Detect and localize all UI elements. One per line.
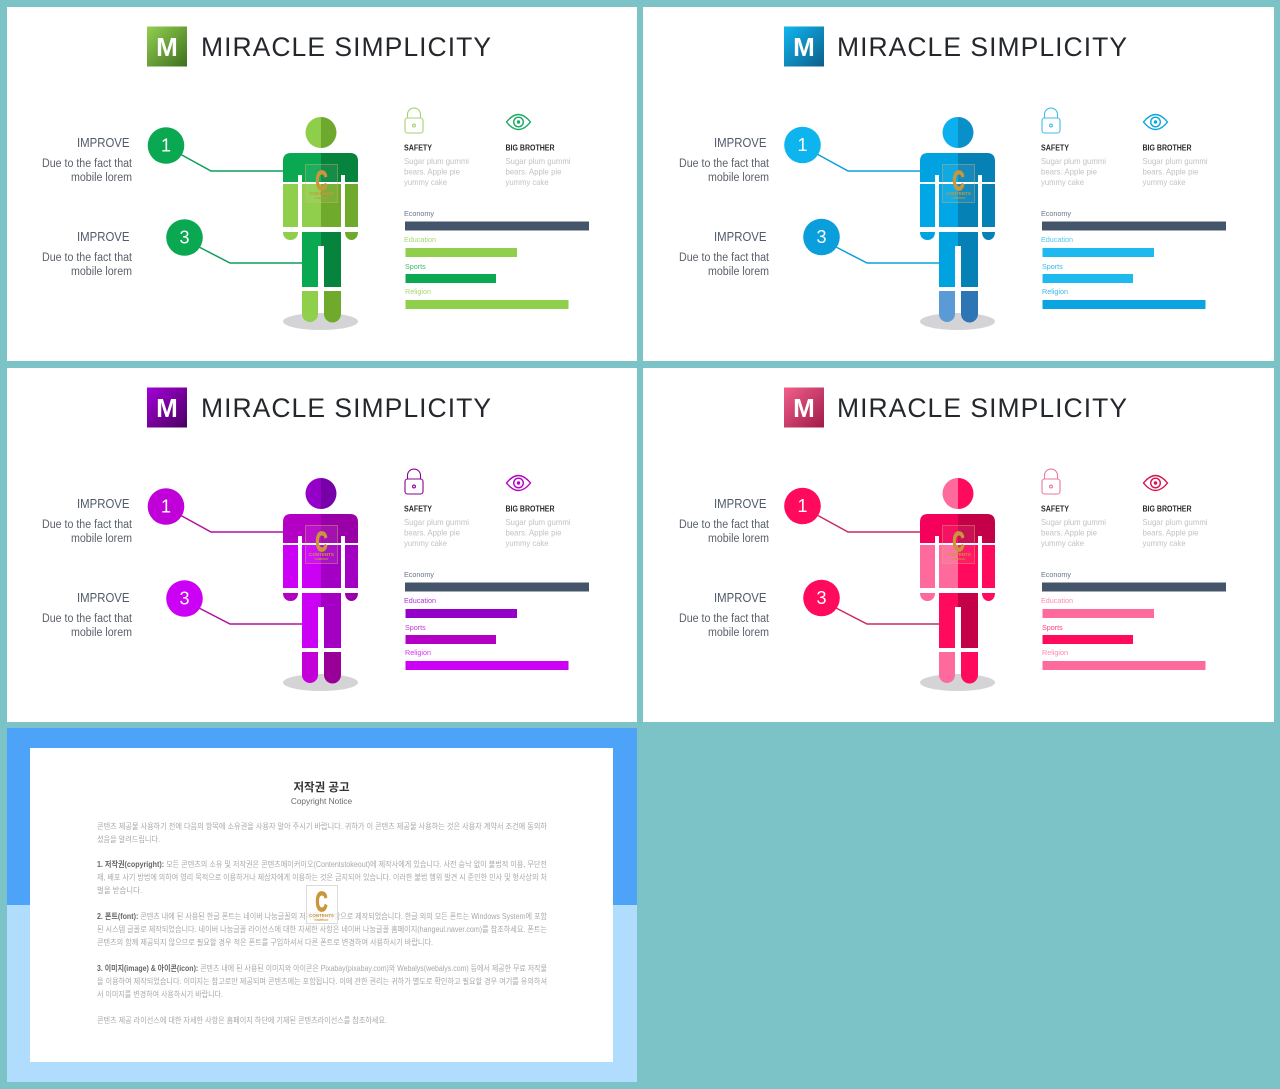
watermark logo: CONTENTS bbox=[309, 191, 334, 196]
text block: big brother: yummy cake bbox=[1142, 539, 1186, 548]
watermark logo: COMPANY bbox=[314, 557, 329, 561]
bar chart: Education bbox=[1041, 596, 1073, 605]
icon: lock bbox=[1042, 469, 1060, 494]
bar chart bbox=[404, 570, 589, 670]
text block: safety: SAFETY bbox=[1041, 504, 1070, 514]
connector line 3 bbox=[199, 247, 302, 263]
text block: safety: SAFETY bbox=[404, 504, 433, 514]
text block: safety: bears. Apple pie bbox=[404, 168, 460, 176]
text block: section 2 font: 2. 폰트(font): 콘텐츠 내에 된 사용된 한글 폰트는 네이버 나눔글꼴의 저작물을 바탕으로 제작되었습니다. 한글 외의 모든 폰트는 Windows System에 포함 bbox=[97, 911, 548, 921]
text block: improve 3: mobile lorem bbox=[71, 627, 132, 639]
text block: safety bbox=[1041, 144, 1106, 187]
panel: pink slide bbox=[643, 368, 1274, 722]
text block: section 1 copyright: 벌을 받습니다. bbox=[97, 885, 142, 895]
connector line 3 bbox=[836, 608, 939, 624]
watermark logo: COMPANY bbox=[314, 196, 329, 200]
text block: improve 3: IMPROVE bbox=[77, 229, 130, 244]
text block: safety: yummy cake bbox=[1041, 539, 1084, 548]
text block: big brother: bears. Apple pie bbox=[1142, 528, 1199, 538]
text block: improve 1: Due to the fact that bbox=[42, 158, 133, 170]
text block: big brother: yummy cake bbox=[1142, 178, 1186, 187]
text block: improve 1: Due to the fact that bbox=[679, 158, 770, 170]
watermark logo: CONTENTS bbox=[946, 191, 971, 196]
text block: safety: bears. Apple pie bbox=[1041, 528, 1097, 538]
title logo: M square bbox=[147, 388, 187, 428]
bar chart: Sports bbox=[405, 262, 426, 271]
heading: copyright notice: 저작권 공고 bbox=[293, 780, 350, 794]
bar chart bbox=[1041, 209, 1226, 309]
text block: safety: bears. Apple pie bbox=[404, 528, 460, 538]
watermark logo: CONTENTS bbox=[946, 552, 971, 557]
text block: improve 1 bbox=[42, 496, 133, 545]
callout circle 3: 3 bbox=[179, 588, 190, 608]
text block: improve 1: mobile lorem bbox=[708, 172, 769, 184]
connector line 3 bbox=[836, 247, 939, 263]
bar chart: Education bbox=[1041, 235, 1073, 244]
text block: big brother: yummy cake bbox=[506, 178, 549, 187]
text block: big brother bbox=[1142, 144, 1208, 187]
connector line 1 bbox=[180, 154, 284, 171]
bar chart: Religion bbox=[405, 287, 431, 296]
callout circle 3: 3 bbox=[816, 227, 827, 247]
icon: eye bbox=[1144, 114, 1168, 130]
human figure bbox=[283, 117, 358, 330]
bar chart: Economy bbox=[404, 570, 434, 579]
text block: improve 1 bbox=[42, 135, 133, 184]
icon: lock bbox=[405, 108, 423, 133]
title logo: M square: M bbox=[156, 393, 178, 423]
icon: eye bbox=[1144, 476, 1168, 490]
text block: section 2 font bbox=[97, 911, 548, 947]
text block: big brother: bears. Apple pie bbox=[506, 528, 562, 538]
callout circle 1 bbox=[148, 127, 184, 164]
text block: improve 1: mobile lorem bbox=[708, 533, 769, 545]
title: MIRACLE SIMPLICITY bbox=[201, 393, 491, 423]
bar chart: Religion bbox=[1042, 648, 1068, 657]
text block: improve 3: mobile lorem bbox=[708, 627, 769, 639]
bar chart: Economy bbox=[1041, 570, 1071, 579]
text block: improve 1 bbox=[679, 135, 770, 184]
text block: safety bbox=[1041, 504, 1106, 548]
heading: copyright notice bbox=[291, 780, 353, 806]
text block: safety: yummy cake bbox=[404, 539, 447, 548]
text block: section 2 font: 콘텐츠의 함께 제공되지 않으므로 필요할 경우 적은 폰트를 구입하셔서 다른 폰트로 변경하여 사용하시기 바랍니다. bbox=[97, 937, 433, 947]
text block: improve 1: IMPROVE bbox=[77, 496, 130, 511]
callout circle 3 bbox=[166, 580, 203, 617]
text block: safety: yummy cake bbox=[404, 178, 447, 187]
icon: lock bbox=[405, 469, 423, 494]
watermark logo bbox=[306, 886, 338, 924]
text block: big brother: bears. Apple pie bbox=[506, 168, 562, 176]
text block: section 3 image and icon: 서 이미지를 변경하여 사용하시기 바랍니다. bbox=[97, 989, 223, 999]
bar chart: Religion bbox=[1042, 287, 1068, 296]
text block: big brother: BIG BROTHER bbox=[1142, 504, 1192, 514]
text block: safety: SAFETY bbox=[1041, 144, 1070, 152]
bar chart: Sports bbox=[1042, 262, 1063, 271]
watermark logo: C bbox=[952, 165, 964, 196]
text block: improve 1: mobile lorem bbox=[71, 172, 132, 184]
watermark logo: C bbox=[316, 886, 328, 917]
title: MIRACLE SIMPLICITY bbox=[201, 32, 491, 62]
text block: improve 1: mobile lorem bbox=[71, 533, 132, 545]
text block: improve 3: Due to the fact that bbox=[679, 613, 770, 625]
panel: blue slide bbox=[643, 7, 1274, 361]
callout circle 1: 1 bbox=[797, 496, 808, 516]
text block: section 3 image and icon: 3. 이미지(image) & 아이콘(icon): 콘텐츠 내에 된 사용된 이미지와 아이콘은 Pixabay(pixabay.com)와 Webalys(webalys.com) 등에서 제공한 무료 저작물 bbox=[97, 963, 547, 973]
watermark logo: C bbox=[316, 526, 328, 557]
callout circle 1: 1 bbox=[797, 135, 808, 155]
watermark logo: COMPANY bbox=[314, 918, 329, 922]
text block: safety: SAFETY bbox=[404, 144, 433, 152]
panel: purple slide bbox=[7, 368, 637, 722]
text block: big brother: yummy cake bbox=[506, 539, 549, 548]
bar chart: Religion bbox=[405, 648, 431, 657]
text block: big brother: Sugar plum gummi bbox=[506, 518, 571, 527]
callout circle 3: 3 bbox=[179, 228, 190, 248]
human figure bbox=[920, 478, 995, 691]
icon: eye bbox=[506, 114, 530, 130]
text block: improve 3: Due to the fact that bbox=[42, 252, 133, 264]
watermark logo bbox=[942, 164, 974, 202]
text block: safety: bears. Apple pie bbox=[1041, 168, 1097, 176]
watermark logo: CONTENTS bbox=[309, 552, 334, 557]
connector line 1 bbox=[817, 154, 921, 171]
text block: big brother: bears. Apple pie bbox=[1142, 168, 1199, 176]
text block: big brother bbox=[506, 504, 571, 548]
watermark logo: C bbox=[952, 526, 964, 557]
bar chart: Sports bbox=[1042, 623, 1063, 632]
watermark logo bbox=[942, 526, 974, 564]
text block: safety: Sugar plum gummi bbox=[404, 157, 469, 166]
icon: eye bbox=[506, 476, 530, 490]
title logo: M square bbox=[784, 388, 824, 428]
title logo: M square: M bbox=[793, 393, 815, 423]
text block: improve 1: IMPROVE bbox=[714, 496, 767, 511]
text block: section 2 font: 된 시스템 글꼴로 제작되었습니다. 네이버 나눔글꼴 라이선스에 대한 자세한 사항은 네이버 나눔글꼴 홈페이지(hangeul.naver.com)를 참조하세요. 폰트는 bbox=[97, 924, 547, 934]
text block: improve 1: Due to the fact that bbox=[42, 519, 133, 531]
title logo: M square bbox=[784, 26, 824, 66]
text block: big brother: Sugar plum gummi bbox=[1142, 518, 1208, 527]
text block: improve 1 bbox=[679, 496, 770, 545]
text block: safety bbox=[404, 144, 469, 187]
text block: improve 3: mobile lorem bbox=[71, 266, 132, 278]
text block: improve 3 bbox=[679, 229, 770, 278]
callout circle 3 bbox=[166, 219, 203, 256]
human figure bbox=[283, 478, 358, 691]
text block: improve 3: Due to the fact that bbox=[679, 252, 770, 264]
title logo: M square: M bbox=[156, 32, 178, 62]
text block: improve 1: IMPROVE bbox=[714, 135, 767, 150]
panel: green slide bbox=[7, 7, 637, 361]
callout circle 3 bbox=[803, 580, 840, 616]
text block: improve 3: IMPROVE bbox=[714, 229, 767, 244]
bar chart: Economy bbox=[404, 209, 434, 218]
text block: improve 3: IMPROVE bbox=[77, 590, 130, 605]
title logo: M square bbox=[147, 26, 187, 66]
bar chart: Education bbox=[404, 596, 436, 605]
text block: improve 3 bbox=[42, 590, 133, 639]
connector line 1 bbox=[817, 515, 921, 532]
text block: big brother: BIG BROTHER bbox=[506, 504, 555, 514]
text block: improve 1: Due to the fact that bbox=[679, 519, 770, 531]
callout circle 3: 3 bbox=[816, 588, 827, 608]
bar chart: Sports bbox=[405, 623, 426, 632]
text block: big brother: Sugar plum gummi bbox=[506, 157, 571, 166]
human figure bbox=[920, 117, 995, 330]
connector line 1 bbox=[180, 515, 284, 532]
text block: improve 3: mobile lorem bbox=[708, 266, 769, 278]
text block: improve 3: IMPROVE bbox=[714, 590, 767, 605]
watermark logo bbox=[306, 164, 338, 202]
text block: big brother: BIG BROTHER bbox=[1142, 144, 1192, 152]
watermark logo: C bbox=[316, 165, 328, 196]
text block: safety: Sugar plum gummi bbox=[404, 518, 469, 527]
panel: copyright notice bbox=[7, 728, 637, 1082]
text block: intro: 콘텐츠 제공물 사용하기 전에 다음의 항목에 소유권을 사용자 알아 주시기 바랍니다. 귀하가 이 콘텐츠 제공물 사용하는 것은 사용자 계약서 조건에 동의하 bbox=[97, 821, 548, 831]
watermark logo: CONTENTS bbox=[309, 913, 334, 918]
callout circle 1 bbox=[784, 488, 821, 524]
text block: big brother bbox=[1142, 504, 1208, 548]
text block: closing note: 콘텐츠 제공 라이선스에 대한 자세한 사항은 홈페이지 하단에 기재된 콘텐츠라이선스를 참조하세요. bbox=[97, 1015, 387, 1025]
callout circle 1 bbox=[148, 488, 184, 525]
text block: improve 3 bbox=[679, 590, 770, 639]
text block: safety: Sugar plum gummi bbox=[1041, 518, 1106, 527]
bar chart bbox=[1041, 570, 1226, 670]
text block: improve 3 bbox=[42, 229, 133, 278]
text block: big brother: Sugar plum gummi bbox=[1142, 157, 1208, 166]
text block: section 1 copyright bbox=[97, 859, 547, 895]
text block: section 1 copyright: 재, 배포 사기 방법에 의하여 영리 목적으로 이용하거나 제삼자에게 이용하는 것은 금지되어 있습니다. 이러한 불법 행위 발견 시 준인한 민사 및 형사상의 처 bbox=[97, 872, 547, 882]
title: MIRACLE SIMPLICITY bbox=[837, 32, 1127, 62]
watermark logo: COMPANY bbox=[951, 196, 966, 200]
text block: safety: Sugar plum gummi bbox=[1041, 157, 1106, 166]
text block: safety bbox=[404, 504, 469, 548]
text block: improve 1: IMPROVE bbox=[77, 135, 130, 150]
callout circle 1 bbox=[784, 127, 821, 163]
text block: section 1 copyright: 1. 저작권(copyright): 모든 콘텐츠의 소유 및 저작권은 콘텐츠메이커이오(Contentstokeout)에 제작사에게 있습니다. 사전 승낙 없이 불법적 이용, 무단전 bbox=[97, 859, 547, 869]
icon: lock bbox=[1042, 108, 1060, 133]
heading: copyright notice: Copyright Notice bbox=[291, 796, 353, 806]
title logo: M square: M bbox=[793, 32, 815, 62]
text block: intro bbox=[97, 821, 548, 844]
title: MIRACLE SIMPLICITY bbox=[837, 393, 1127, 423]
bar chart: Education bbox=[404, 235, 436, 244]
text block: improve 3: Due to the fact that bbox=[42, 613, 133, 625]
connector line 3 bbox=[199, 608, 302, 624]
text block: section 3 image and icon: 을 이용하여 제작되었습니다. 이미지는 참고로만 제공되며 콘텐츠에는 포함됩니다. 이에 관한 권리는 귀하가 별도로 확인하고 필요할 경우 여기를 유의하셔 bbox=[97, 976, 547, 986]
text block: intro: 셨음을 알려드립니다. bbox=[97, 834, 160, 844]
callout circle 3 bbox=[803, 219, 840, 255]
bar chart: Economy bbox=[1041, 209, 1071, 218]
text block: big brother: BIG BROTHER bbox=[506, 144, 555, 152]
bar chart bbox=[404, 209, 589, 309]
watermark logo bbox=[306, 526, 338, 564]
text block: section 3 image and icon bbox=[97, 963, 547, 999]
text block: big brother bbox=[506, 144, 571, 187]
callout circle 1: 1 bbox=[161, 136, 171, 156]
watermark logo: COMPANY bbox=[951, 557, 966, 561]
text block: safety: yummy cake bbox=[1041, 178, 1084, 187]
callout circle 1: 1 bbox=[161, 496, 171, 516]
